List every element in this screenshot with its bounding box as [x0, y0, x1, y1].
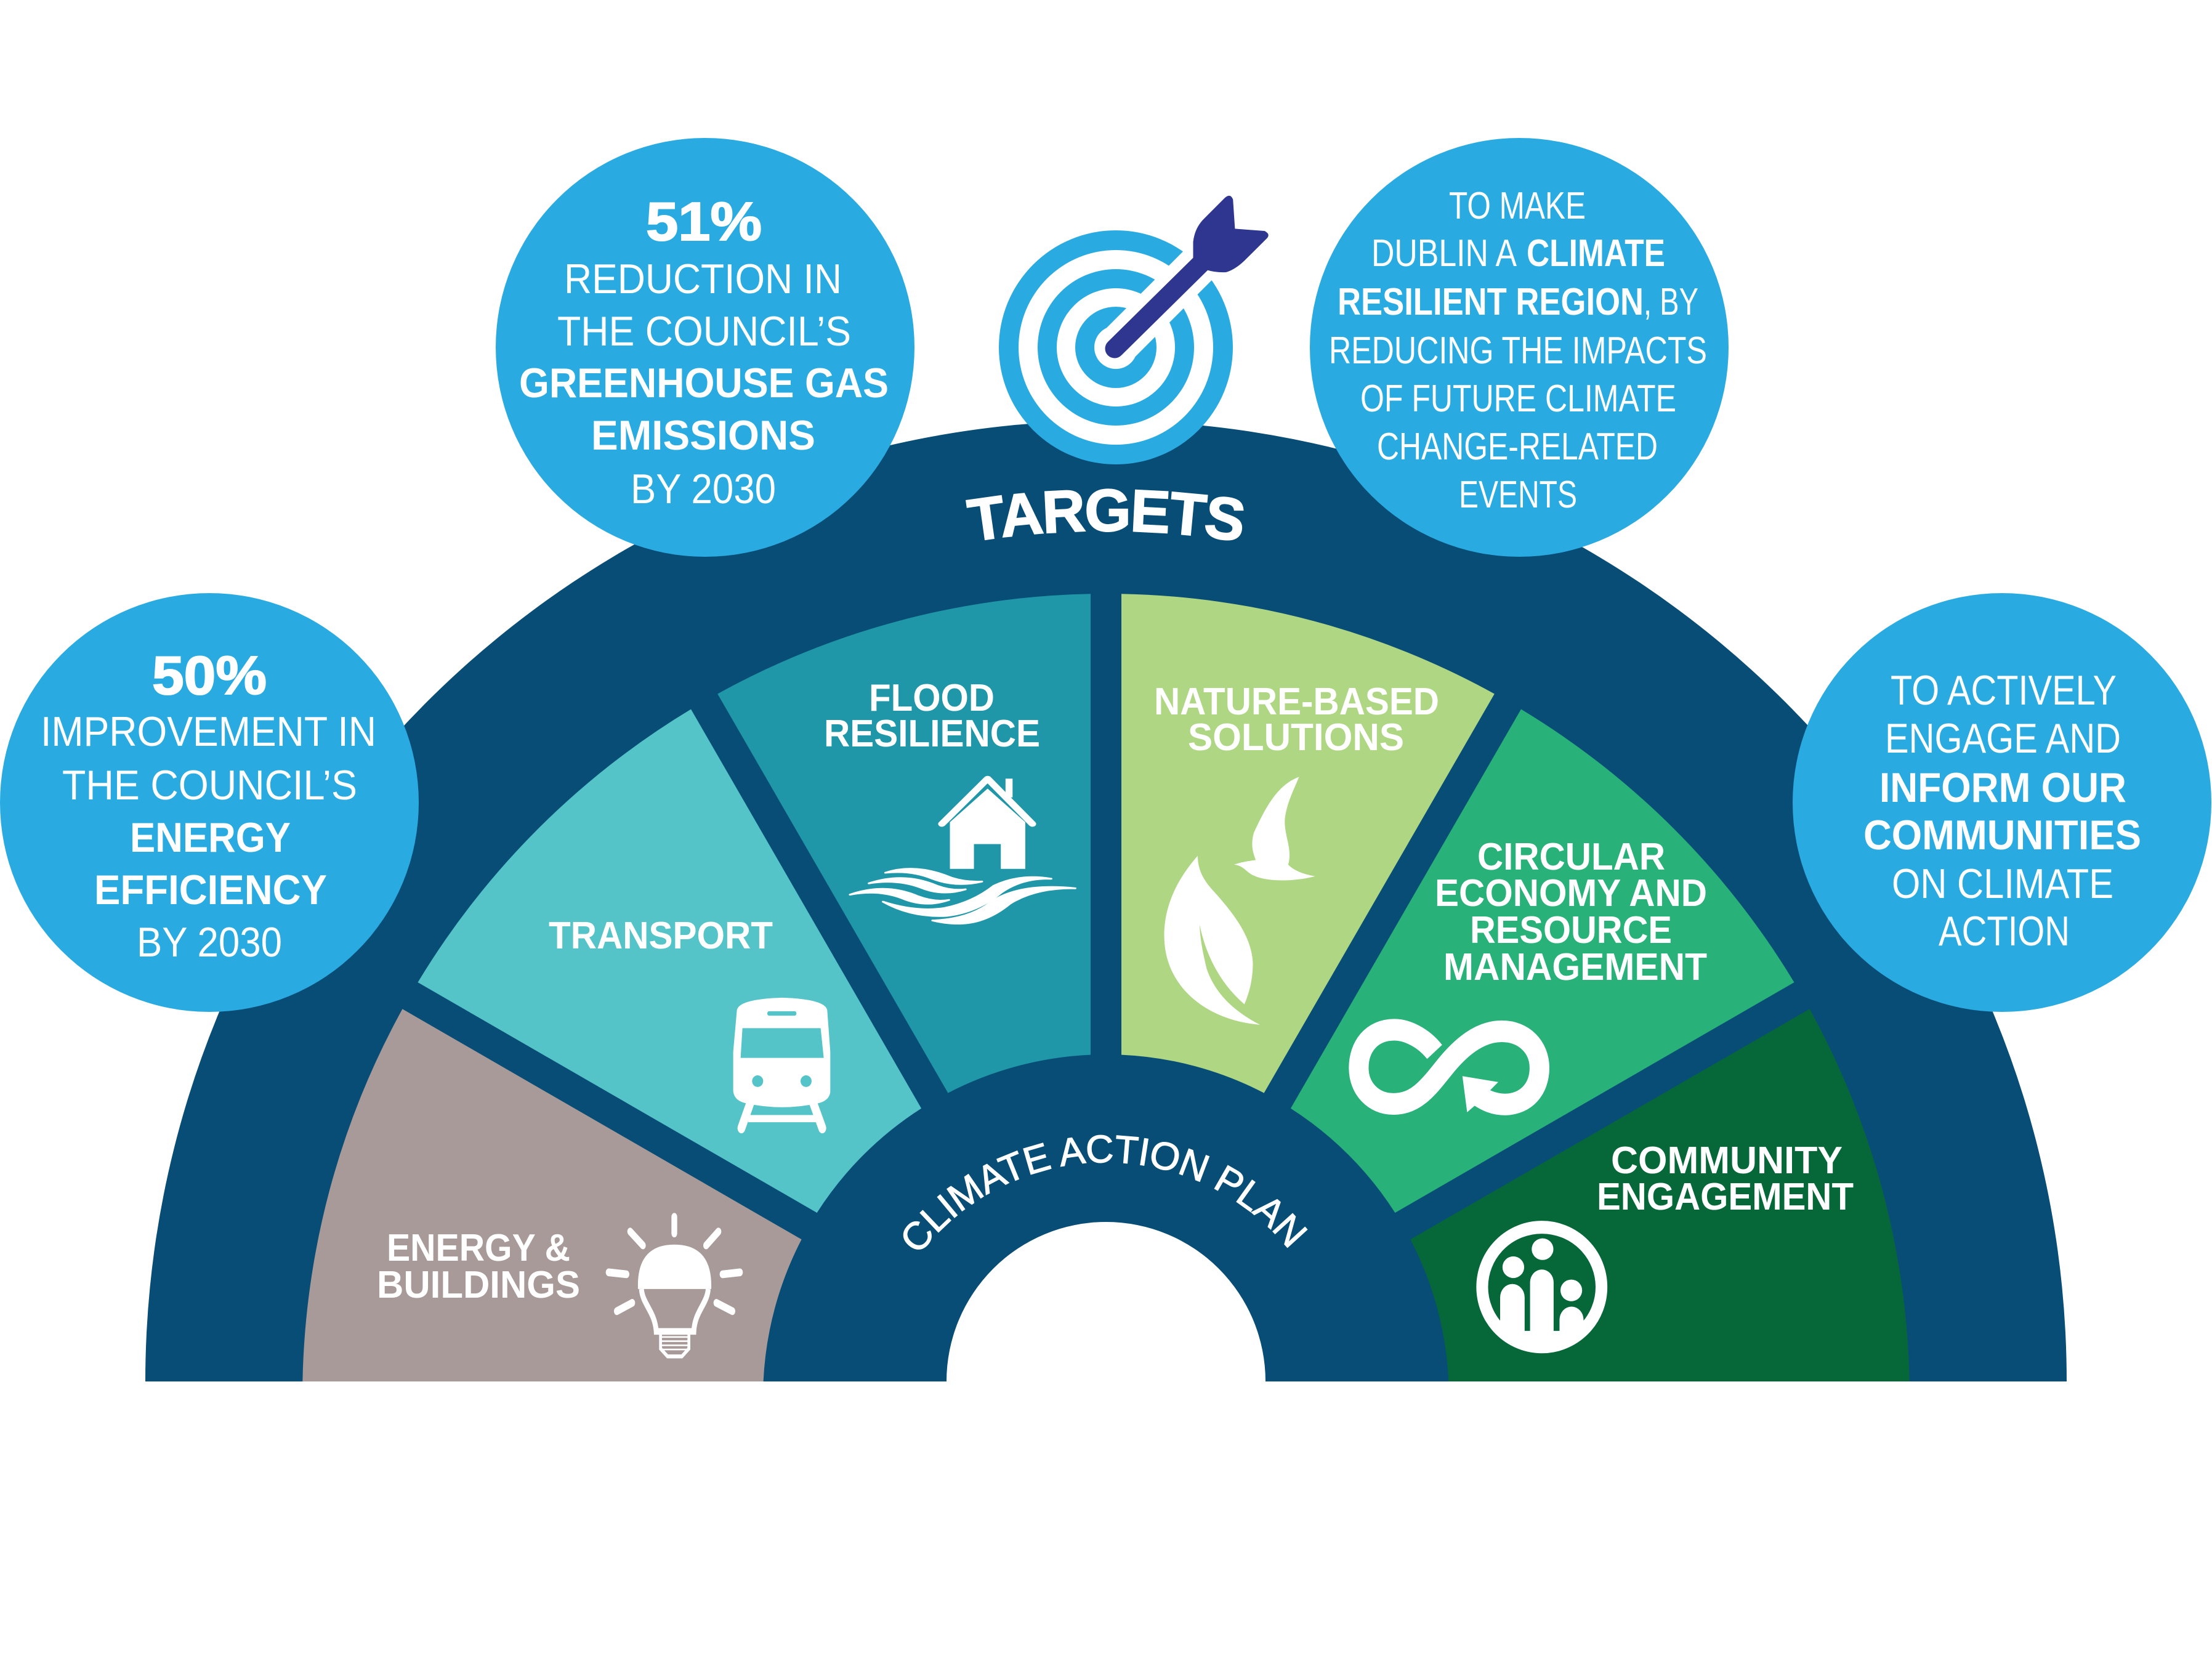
circle: energy efficiency target: BY 2030	[137, 919, 282, 966]
label: circular economy and resource management: ECONOMY AND	[1435, 872, 1707, 915]
circle: inform communities target	[1793, 593, 2211, 1012]
icon: bird and leaf	[1165, 777, 1315, 1025]
circle: greenhouse gas target: 51%	[646, 191, 762, 252]
label: flood resilience: RESILIENCE	[824, 713, 1040, 755]
circle: inform communities target: ACTION	[1939, 908, 2070, 955]
segment: energy and buildings	[302, 1009, 802, 1381]
circle: climate resilient region target: CHANGE-RELATED	[1377, 426, 1658, 468]
circle: greenhouse gas target: REDUCTION IN	[564, 256, 842, 302]
circle: greenhouse gas target: EMISSIONS	[591, 412, 815, 459]
label: energy and buildings: ENERGY &	[387, 1227, 570, 1269]
circle: greenhouse gas target: GREENHOUSE GAS	[519, 360, 889, 406]
label: circular economy and resource management: MANAGEMENT	[1443, 946, 1707, 989]
label: circular economy and resource management: RESOURCE	[1470, 909, 1672, 952]
label: transport: TRANSPORT	[549, 915, 773, 957]
circle: energy efficiency target: 50%	[152, 645, 267, 706]
circle: energy efficiency target	[0, 593, 419, 1012]
label: flood resilience	[824, 677, 1040, 755]
circle: climate resilient region target: CLIMATE	[1527, 232, 1665, 275]
circle: climate resilient region target: OF FUTURE CLIMATE	[1360, 378, 1676, 420]
label: community engagement	[1597, 1139, 1854, 1218]
segment: community engagement	[1410, 1009, 1910, 1381]
label: nature-based solutions	[1154, 681, 1439, 759]
circle: climate resilient region target: REDUCING THE IMPACTS	[1329, 330, 1707, 372]
circle: energy efficiency target: THE COUNCIL’S	[62, 762, 357, 809]
circle: inform communities target: ON CLIMATE	[1892, 860, 2113, 907]
icon: target with dart	[999, 196, 1269, 464]
label: nature-based solutions: NATURE-BASED	[1154, 681, 1439, 723]
icon: house on waves	[850, 778, 1075, 924]
icon: people in circle	[1482, 1227, 1602, 1347]
icon: infinity loop arrow	[1358, 1030, 1540, 1112]
segment: nature-based solutions	[1121, 594, 1495, 1093]
label: circular economy and resource management	[1435, 836, 1707, 989]
circle: inform communities target: INFORM OUR	[1879, 764, 2126, 811]
circle: climate resilient region target: DUBLIN A	[1371, 232, 1517, 275]
circle: climate resilient region target	[1310, 138, 1729, 557]
circle: energy efficiency target: IMPROVEMENT IN	[41, 708, 376, 755]
circle: climate resilient region target: , BY	[1644, 281, 1698, 323]
circle: greenhouse gas target: BY 2030	[631, 466, 776, 512]
circle: climate resilient region target: TO MAKE	[1449, 185, 1586, 227]
circle: energy efficiency target: EFFICIENCY	[94, 867, 327, 913]
icon: light bulb	[608, 1217, 740, 1356]
circle: energy efficiency target: ENERGY	[130, 814, 291, 861]
circle: climate resilient region target: RESILIENT REGION	[1338, 281, 1644, 323]
label: community engagement: ENGAGEMENT	[1597, 1176, 1854, 1218]
icon: train	[733, 998, 830, 1128]
label: nature-based solutions: SOLUTIONS	[1188, 716, 1404, 759]
circle: climate resilient region target: EVENTS	[1459, 474, 1577, 516]
label: community engagement: COMMUNITY	[1611, 1139, 1843, 1182]
heading: targets: TARGETS	[966, 488, 1244, 541]
segment: transport	[418, 710, 921, 1213]
segment: circular economy	[1291, 710, 1794, 1213]
circle: greenhouse gas target	[496, 138, 914, 557]
label: circular economy and resource management: CIRCULAR	[1477, 836, 1665, 878]
circle: inform communities target: COMMUNITIES	[1863, 812, 2141, 859]
label: energy and buildings: BUILDINGS	[377, 1264, 580, 1306]
circle: inform communities target: ENGAGE AND	[1885, 715, 2121, 762]
heading: climate action plan: CLIMATE ACTION PLAN	[903, 1134, 1308, 1250]
outer navy arch	[145, 421, 2067, 1381]
circle: inform communities target: TO ACTIVELY	[1891, 667, 2117, 714]
label: flood resilience: FLOOD	[869, 677, 995, 719]
circle: greenhouse gas target: THE COUNCIL’S	[557, 308, 851, 355]
label: energy and buildings	[377, 1227, 580, 1306]
segment: flood resilience	[717, 594, 1091, 1093]
